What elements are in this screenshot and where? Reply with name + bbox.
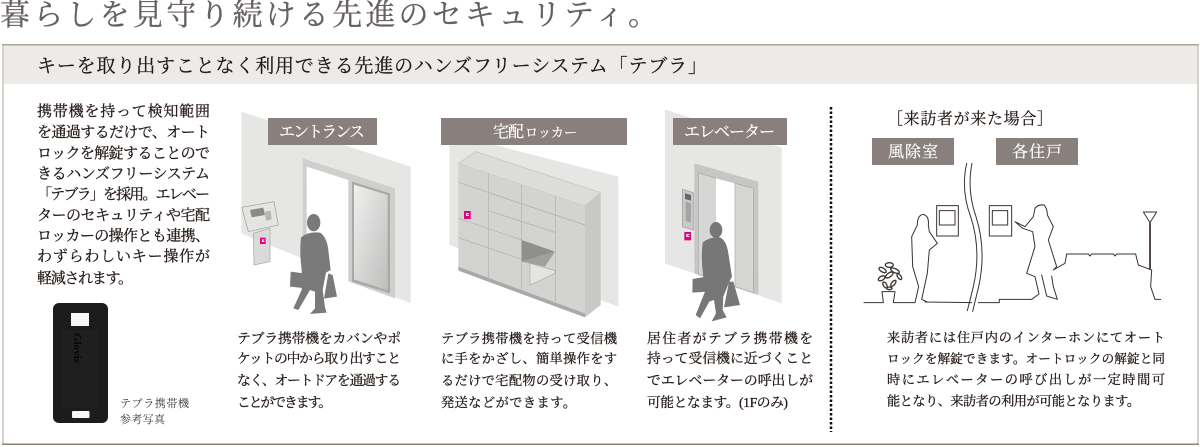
label: delivery locker: ロッカー (525, 125, 577, 140)
label: elevator (673, 118, 787, 145)
caption: fob: 参考写真 (120, 412, 166, 426)
text block: visitor caption: 時にエレベーターの呼び出しが一定時間可 (887, 371, 1165, 387)
text block: intro: わずらわしいキー操作が (37, 248, 210, 265)
photo: Tebra fob: Glovis (71, 333, 83, 364)
text block: intro: ロッカーの操作とも連携、 (37, 226, 210, 244)
label: entrance: エントランス (279, 124, 365, 141)
caption: fob (120, 396, 190, 426)
label: delivery locker: 宅配 (493, 123, 524, 141)
caption: fob: テブラ携帯機 (120, 396, 190, 410)
text block: locker caption: るだけで宅配物の受け取り、 (441, 372, 617, 388)
text block: entrance caption: なく、オートドアを通過する (237, 373, 401, 388)
icon: potted plant (877, 263, 903, 290)
text block: entrance caption: ことができます。 (237, 395, 332, 410)
text block: entrance caption: テブラ携帯機をカバンやポ (237, 330, 401, 346)
label: windbreak room: 風除室 (888, 143, 938, 161)
text block: visitor caption (887, 329, 1165, 408)
text block: elevator caption: 持って受信機に近づくこと (647, 350, 813, 366)
label: each dwelling: 各住戸 (1012, 143, 1062, 161)
text block: locker caption: テブラ携帯機を持って受信機 (441, 330, 618, 346)
label: windbreak room (872, 138, 954, 165)
text block: elevator caption (647, 330, 813, 411)
text block: visitor caption: 来訪者には住戸内のインターホンにてオート (887, 329, 1165, 345)
text block: entrance caption (237, 330, 401, 410)
text block: locker caption: に手をかざし、簡単操作をす (441, 350, 617, 366)
photo: Tebra fob (53, 303, 108, 423)
text block: locker caption (441, 330, 618, 410)
text block: intro: 「テブラ」を採用。エレベー (37, 186, 210, 203)
illustration: delivery locker (449, 133, 618, 317)
label: entrance (268, 118, 377, 145)
text block: elevator caption: 可能となます。(1Fのみ) (647, 395, 788, 411)
text block: locker caption: 発送などができます。 (441, 395, 576, 410)
heading: when a visitor comes: ［来訪者が来た場合］ (887, 110, 1053, 128)
text block: elevator caption: でエレベーターの呼出しが (647, 373, 813, 388)
text block: entrance caption: ケットの中から取り出すこと (237, 350, 401, 366)
label: delivery locker (441, 118, 627, 145)
text block: intro: ロックを解錠することので (37, 145, 210, 162)
illustration: entrance (241, 112, 411, 314)
text block: intro: 軽減されます。 (37, 269, 133, 287)
illustration: visitor line drawing (864, 163, 1161, 311)
heading: hands-free system: キーを取り出すことなく利用できる先進のハンズフリーシステム「テブラ」 (37, 55, 707, 77)
text block: intro: 携帯機を持って検知範囲 (37, 103, 210, 120)
text block: elevator caption: 居住者がテブラ携帯機を (647, 330, 813, 346)
text block: visitor caption: ロックを解錠できます。オートロックの解錠と同 (887, 351, 1165, 366)
label: each dwelling (996, 138, 1078, 165)
figure: resident with bags (692, 222, 740, 321)
figure: resident with bags (290, 214, 337, 314)
illustration: elevator (665, 109, 782, 321)
text block: intro: を通過するだけで、オート (37, 124, 210, 141)
label: elevator: エレベーター (684, 123, 775, 141)
text block: visitor caption: 能となり、来訪者の利用が可能となります。 (887, 392, 1140, 408)
text block: intro: きるハンズフリーシステム (37, 166, 210, 182)
text block: intro: ターのセキュリティや宅配 (37, 207, 210, 224)
text block: intro (37, 103, 210, 287)
